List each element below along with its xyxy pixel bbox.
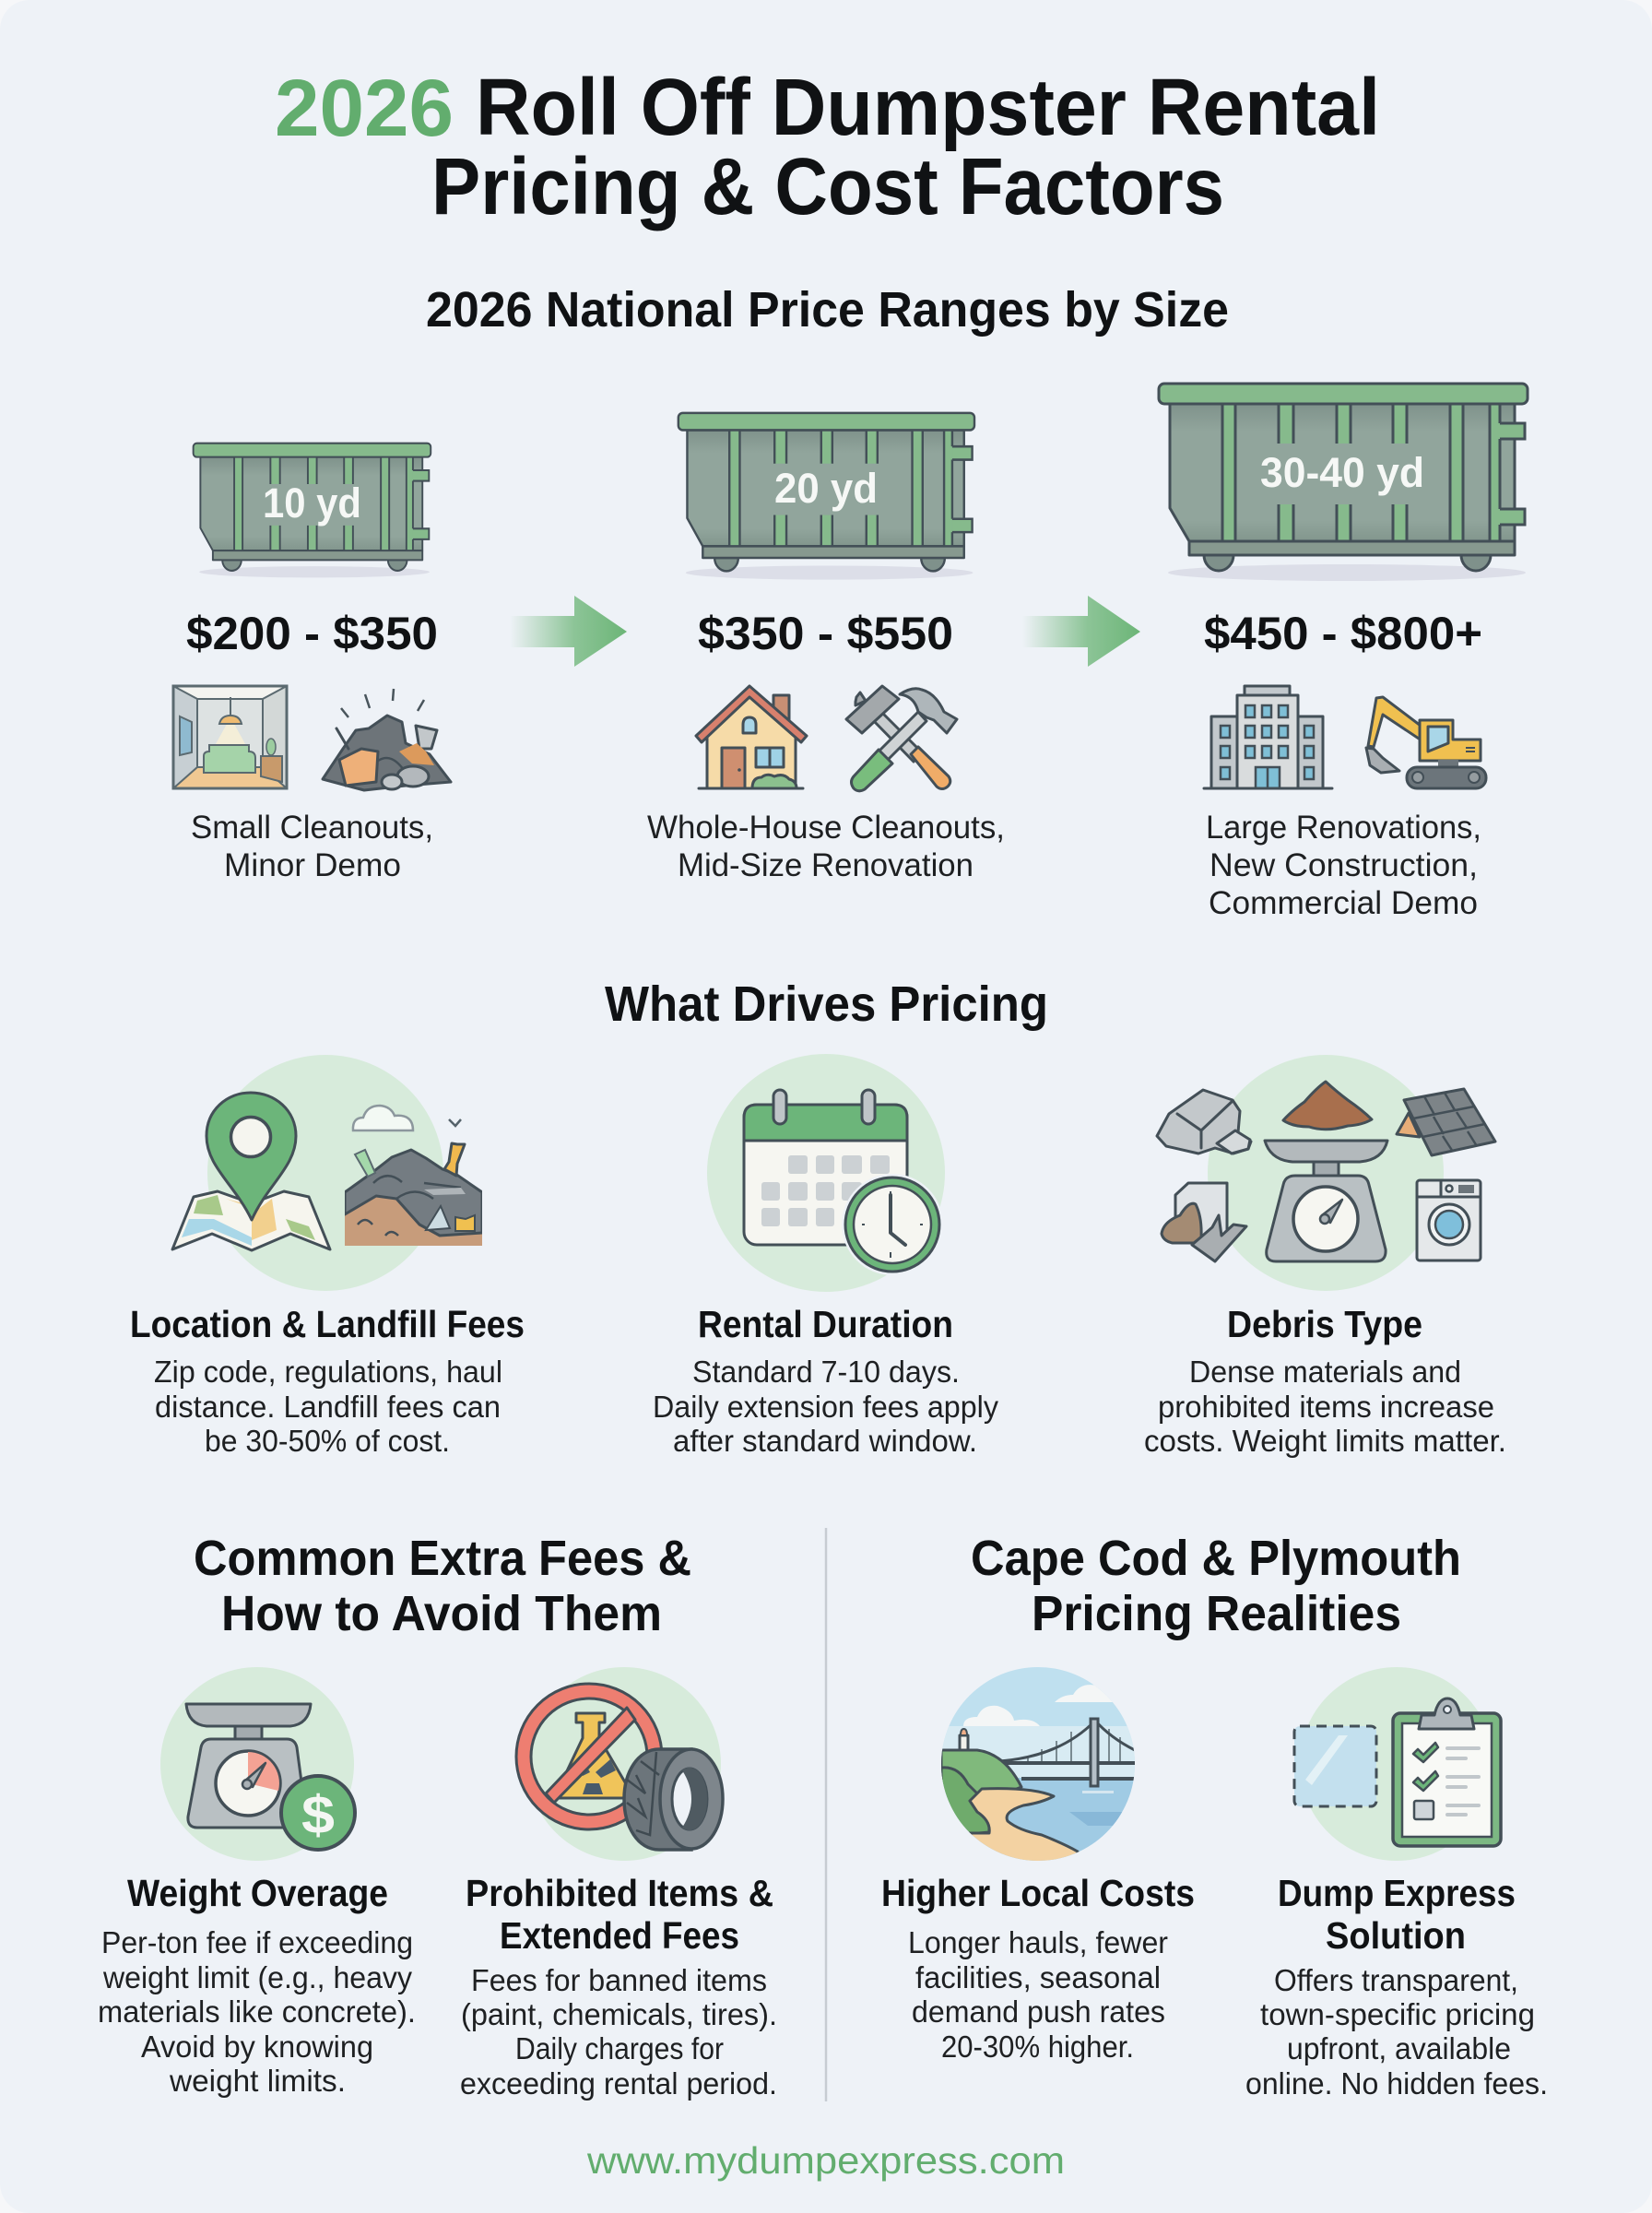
text: weight description: Per-ton fee if exceeding xyxy=(101,1925,413,1959)
caption: 10 yd uses xyxy=(191,810,433,883)
icon: 10 yd dumpster xyxy=(194,444,431,577)
icon: house xyxy=(696,686,807,788)
text: duration description xyxy=(653,1355,998,1458)
text: solution description: upfront, available xyxy=(1287,2031,1511,2065)
subheading: dump express solution: Dump Express xyxy=(1278,1872,1516,1914)
icon: prohibited sign and tire xyxy=(516,1667,723,1861)
text: local costs description: facilities, seasonal xyxy=(915,1960,1161,1994)
price: 20 yd: $350 - $550 xyxy=(698,608,953,659)
text: prohibited description xyxy=(460,1963,777,2101)
icon: scale with dollar coin xyxy=(160,1667,355,1861)
caption: 20 yd uses: Mid-Size Renovation xyxy=(678,847,974,883)
text: solution description xyxy=(1245,1963,1548,2101)
text: debris description: costs. Weight limits matter. xyxy=(1144,1424,1506,1458)
text: weight description xyxy=(98,1925,416,2098)
caption: 30-40 yd uses xyxy=(1206,810,1481,921)
caption: 10 yd uses: Minor Demo xyxy=(224,847,401,883)
subheading: higher local costs: Higher Local Costs xyxy=(881,1872,1195,1914)
icon: 30-40 yd dumpster xyxy=(1159,384,1528,581)
caption: 30-40 yd uses: Commercial Demo xyxy=(1209,885,1478,921)
text: weight description: weight limit (e.g., heavy xyxy=(102,1960,412,1994)
text: debris description: prohibited items increase xyxy=(1158,1390,1494,1424)
icon: 20 yd dumpster: 20 yd xyxy=(774,465,878,512)
text: prohibited description: Daily charges for xyxy=(515,2031,724,2065)
panel: rental duration xyxy=(653,1054,998,1458)
subheading: debris type: Debris Type xyxy=(1227,1303,1422,1345)
icon: excavator xyxy=(1366,697,1486,788)
panel: weight overage xyxy=(98,1667,416,2098)
panel: 10 yard dumpster xyxy=(173,444,451,883)
icon: office building xyxy=(1204,686,1332,788)
heading: national price ranges: 2026 National Price Ranges by Size xyxy=(426,282,1229,337)
title xyxy=(275,63,1380,231)
subheading: weight overage: Weight Overage xyxy=(127,1872,388,1914)
title: 2026 xyxy=(275,64,454,153)
icon: scale with debris xyxy=(1157,1055,1495,1291)
title: Pricing & Cost Factors xyxy=(431,142,1224,231)
text: location description: be 30-50% of cost. xyxy=(205,1424,450,1458)
panel: 30-40 yard dumpster xyxy=(1159,384,1528,921)
heading: cape cod and plymouth: Cape Cod & Plymouth xyxy=(971,1531,1461,1586)
subheading: prohibited items and extended fees: Prohibited Items & xyxy=(466,1872,773,1914)
subheading: rental duration: Rental Duration xyxy=(698,1303,953,1345)
panel: higher local costs xyxy=(881,1667,1195,2064)
icon: room interior xyxy=(173,686,287,788)
subheading: dump express solution xyxy=(1278,1872,1516,1957)
icon: clipboard with dashed square xyxy=(1294,1667,1501,1861)
icon: map pin and landfill xyxy=(172,1055,482,1291)
heading: common extra fees: How to Avoid Them xyxy=(221,1586,662,1641)
text: prohibited description: exceeding rental period. xyxy=(460,2066,777,2101)
text: debris description xyxy=(1144,1355,1506,1458)
arrow: 10 yd to 20 yd xyxy=(510,596,627,667)
text: solution description: online. No hidden fees. xyxy=(1245,2066,1548,2101)
text: duration description: Daily extension fees apply xyxy=(653,1390,998,1424)
caption: 20 yd uses: Whole-House Cleanouts, xyxy=(647,810,1005,846)
text: local costs description: Longer hauls, fewer xyxy=(908,1925,1168,1959)
icon: coastline and bridge xyxy=(941,1667,1135,1872)
subheading: dump express solution: Solution xyxy=(1326,1914,1466,1957)
heading: common extra fees xyxy=(194,1531,691,1641)
arrow: 20 yd to 30-40 yd xyxy=(1022,596,1140,667)
panel: prohibited items xyxy=(460,1667,777,2101)
text: solution description: town-specific pricing xyxy=(1260,1997,1535,2031)
caption: 30-40 yd uses: Large Renovations, xyxy=(1206,810,1481,846)
panel: location and landfill fees xyxy=(130,1055,525,1458)
subheading: prohibited items and extended fees xyxy=(466,1872,773,1957)
text: prohibited description: Fees for banned items xyxy=(471,1963,767,1997)
icon: 10 yd dumpster: 10 yd xyxy=(263,479,361,527)
heading: common extra fees: Common Extra Fees & xyxy=(194,1531,691,1586)
icon: rubble pile xyxy=(323,689,451,790)
caption: 20 yd uses xyxy=(647,810,1005,883)
heading: what drives pricing: What Drives Pricing xyxy=(605,976,1048,1032)
panel: dump express solution xyxy=(1245,1667,1548,2101)
title: Roll Off Dumpster Rental xyxy=(476,63,1380,152)
footer: website url: www.mydumpexpress.com xyxy=(586,2139,1065,2182)
icon: 30-40 yd dumpster: 30-40 yd xyxy=(1260,449,1424,496)
text: location description: Zip code, regulations, haul xyxy=(154,1355,502,1389)
icon: 20 yd dumpster xyxy=(678,413,974,580)
text: local costs description: demand push rates xyxy=(912,1994,1165,2029)
text: solution description: Offers transparent, xyxy=(1274,1963,1518,1997)
subheading: location and landfill fees: Location & Landfill Fees xyxy=(130,1303,525,1345)
text: weight description: materials like concrete). xyxy=(98,1994,416,2029)
text: local costs description xyxy=(908,1925,1168,2064)
caption: 10 yd uses: Small Cleanouts, xyxy=(191,810,433,846)
price: 30-40 yd: $450 - $800+ xyxy=(1204,608,1482,659)
panel: 20 yard dumpster xyxy=(647,413,1005,883)
caption: 30-40 yd uses: New Construction, xyxy=(1210,847,1478,883)
text: weight description: weight limits. xyxy=(169,2064,346,2098)
icon: calendar and clock xyxy=(707,1054,945,1292)
text: prohibited description: (paint, chemicals, tires). xyxy=(461,1997,777,2031)
text: location description: distance. Landfill fees can xyxy=(155,1390,501,1424)
subheading: prohibited items and extended fees: Extended Fees xyxy=(500,1914,739,1957)
text: local costs description: 20-30% higher. xyxy=(941,2030,1134,2064)
heading: cape cod and plymouth: Pricing Realities xyxy=(1032,1586,1401,1641)
text: duration description: Standard 7-10 days. xyxy=(692,1355,960,1389)
text: duration description: after standard window. xyxy=(673,1424,977,1458)
heading: cape cod and plymouth xyxy=(971,1531,1461,1641)
icon: crossed hammers xyxy=(846,686,957,791)
text: weight description: Avoid by knowing xyxy=(141,2030,373,2064)
text: location description xyxy=(154,1355,502,1458)
panel: debris type xyxy=(1144,1055,1506,1458)
price: 10 yd: $200 - $350 xyxy=(186,608,438,659)
icon: scale with dollar coin: $ xyxy=(301,1785,335,1845)
text: debris description: Dense materials and xyxy=(1189,1355,1461,1389)
